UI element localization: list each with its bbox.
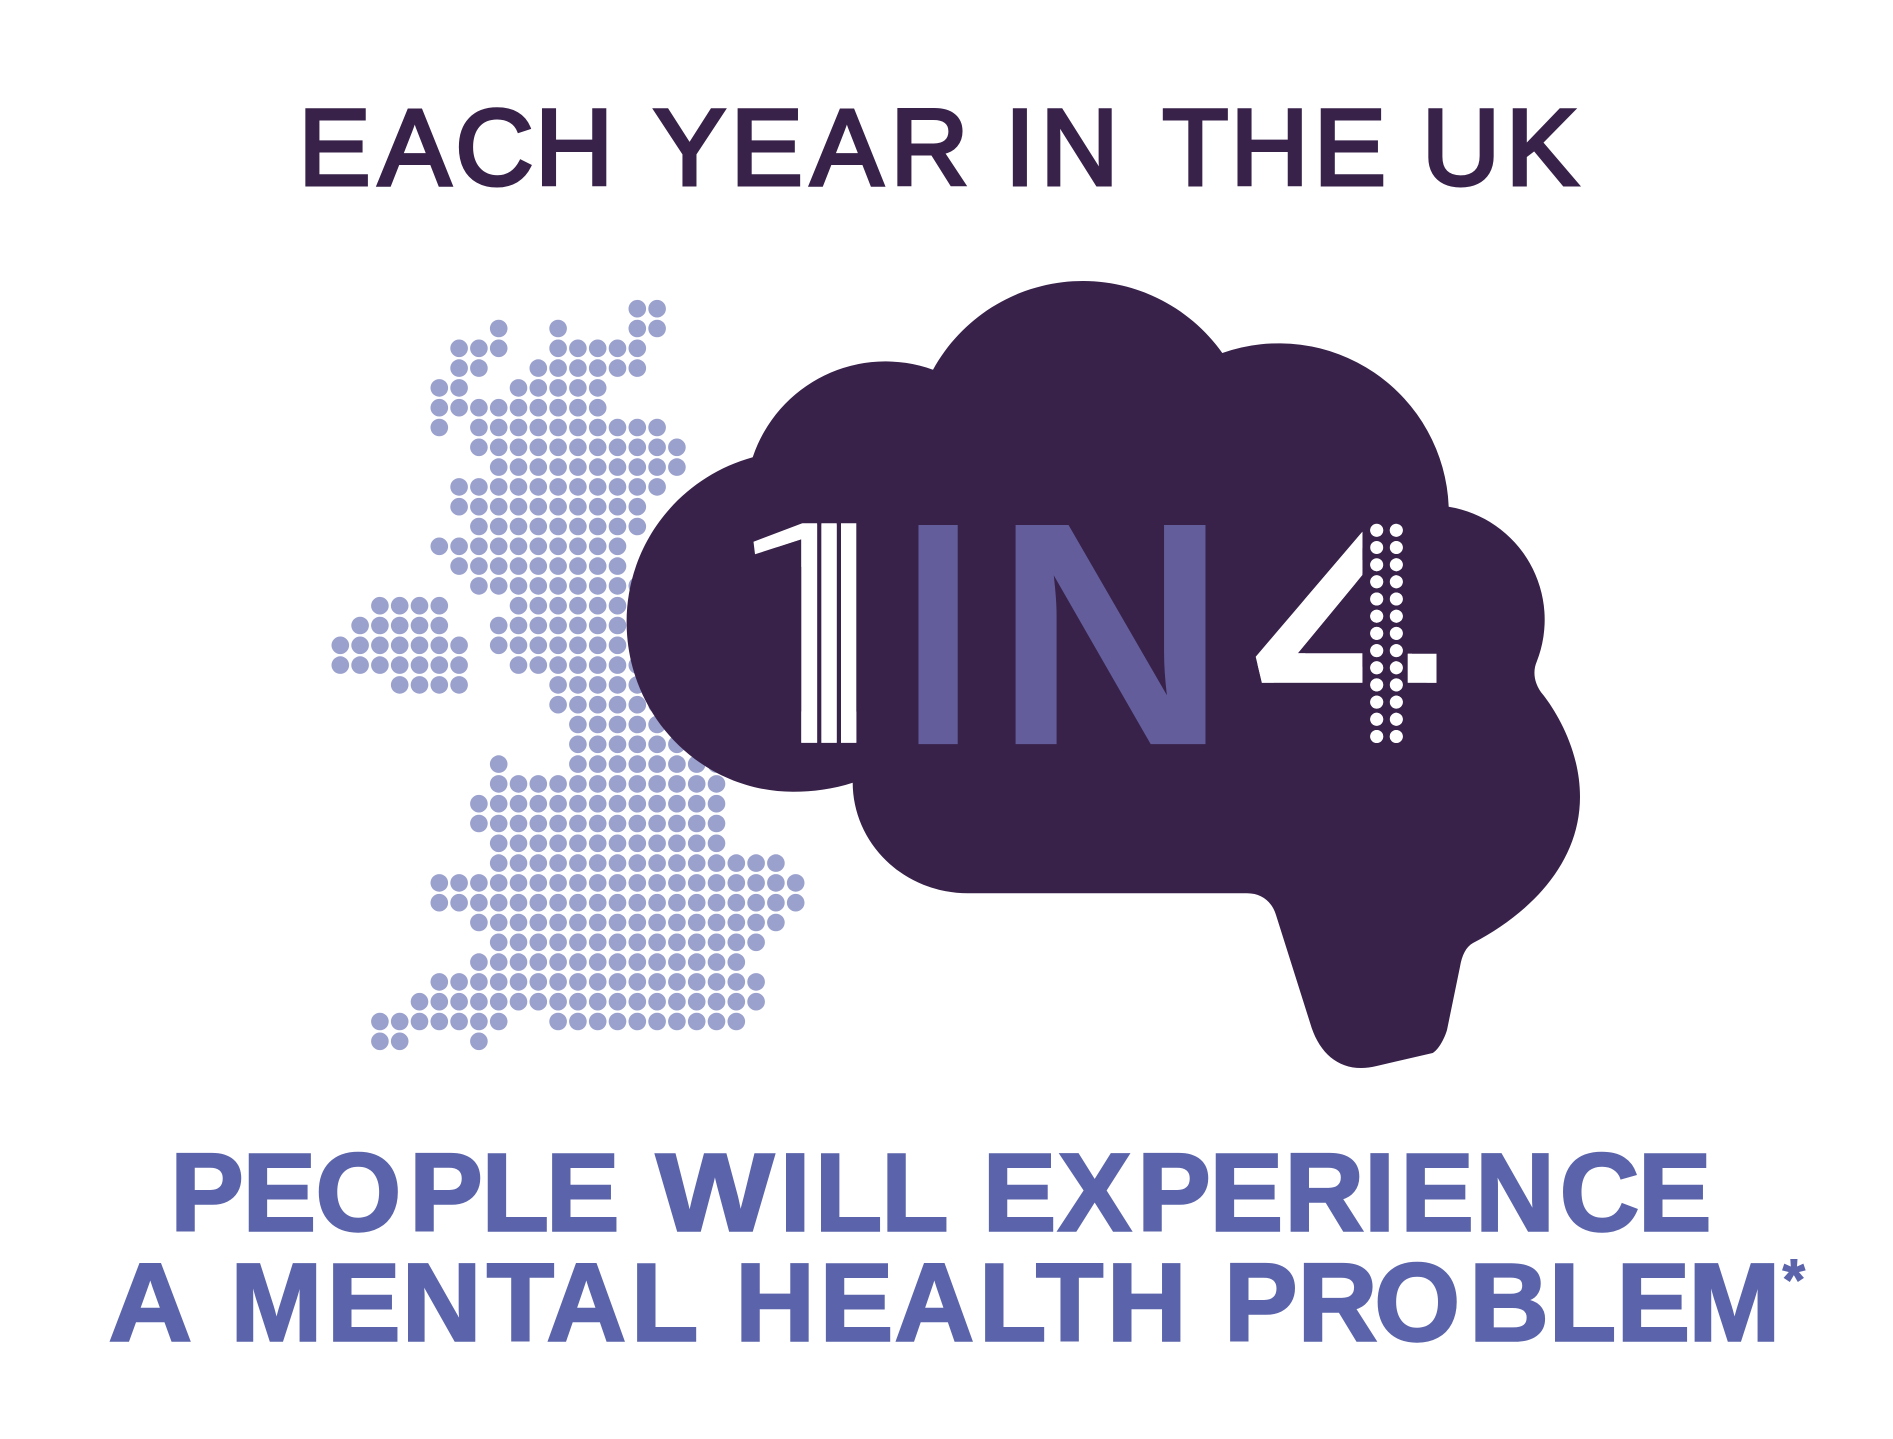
icon: brain-shaped head cloud	[627, 281, 1580, 1068]
subtitle: A	[108, 1241, 192, 1364]
subtitle: EXPERIENCE	[983, 1131, 1712, 1254]
subtitle: PEOPLE	[170, 1131, 619, 1254]
title: IN	[1005, 87, 1118, 208]
dot map of the UK	[340, 309, 796, 1041]
word IN: N	[994, 455, 1227, 812]
subtitle: ILL	[780, 1131, 949, 1254]
title: EACH	[298, 87, 613, 208]
title: UK	[1422, 87, 1578, 208]
dotted numeral 4: 4	[1251, 456, 1448, 812]
subtitle: W	[656, 1131, 774, 1254]
subtitle: *	[1782, 1248, 1806, 1313]
subtitle: HEALTH	[735, 1241, 1187, 1364]
subtitle: MENTAL	[230, 1241, 698, 1364]
word IN	[918, 525, 1206, 744]
word IN: I	[895, 455, 984, 812]
striped numeral 1: 1	[735, 455, 912, 812]
title: THE	[1162, 87, 1386, 208]
title: YEAR	[654, 87, 968, 208]
subtitle: PROBLEM	[1224, 1241, 1780, 1364]
subtitle	[108, 1131, 1806, 1364]
headline statistic: 1 in 4	[754, 523, 1436, 744]
title	[298, 87, 1578, 208]
